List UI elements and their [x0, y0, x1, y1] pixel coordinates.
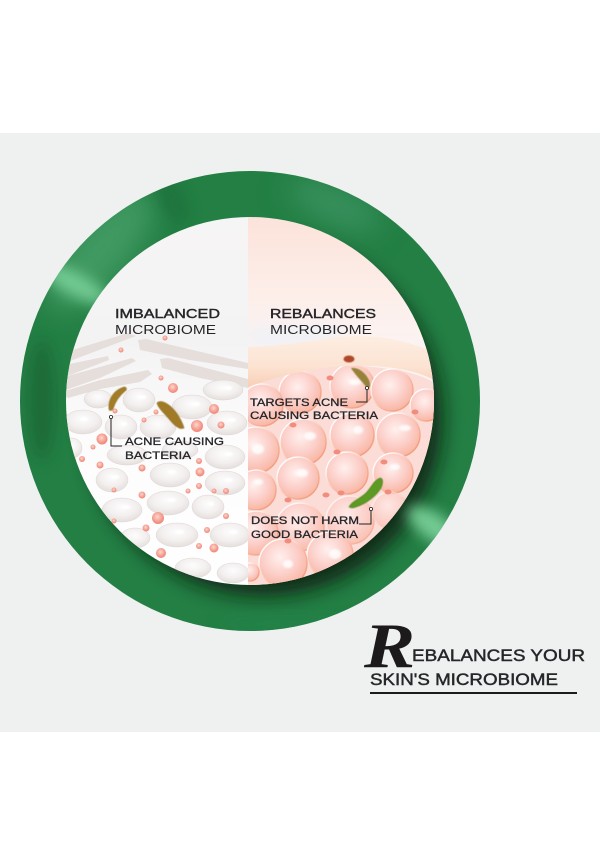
callout: does not harm good bacteria: GOOD BACTERIA: [251, 529, 359, 541]
icon: acne bacteria, left: [109, 387, 126, 410]
callout: acne causing bacteria: BACTERIA: [125, 450, 192, 462]
callout: targets acne causing bacteria: TARGETS ACNE: [250, 397, 348, 409]
heading: imbalanced microbiome: IMBALANCED: [115, 306, 220, 321]
icon: good bacteria: [349, 478, 383, 508]
icon: acne bacteria, right: [157, 402, 184, 429]
heading: imbalanced microbiome: [115, 306, 220, 337]
heading: rebalances microbiome: MICROBIOME: [270, 322, 372, 337]
ring shading: top dark: [154, 182, 184, 218]
callout: targets acne causing bacteria: [250, 386, 379, 422]
background band: [0, 133, 600, 732]
tagline: rebalances your skin's microbiome: SKIN'S MICROBIOME: [370, 670, 558, 689]
panel: imbalanced side: [60, 210, 250, 590]
icon: skin blemish: [344, 356, 354, 362]
callout: acne causing bacteria: ACNE CAUSING: [125, 436, 224, 448]
white cell glints: [117, 387, 236, 532]
microbiome disk: [60, 210, 442, 590]
green ring: [20, 170, 480, 631]
ring highlight: lower right: [398, 496, 450, 547]
heading: imbalanced microbiome: MICROBIOME: [115, 322, 216, 337]
callout: targets acne causing bacteria: CAUSING BACTERIA: [250, 410, 379, 422]
skin surface band: [248, 336, 438, 387]
ring highlight: upper left sheen: [42, 193, 159, 315]
ring shading: dark left edge: [28, 340, 56, 460]
skin fibres: [60, 333, 248, 398]
callout: acne causing bacteria: [109, 415, 224, 462]
ring shading: inner drop shadow: [86, 240, 442, 596]
pink cells: [248, 366, 434, 584]
cell glints: [252, 379, 411, 568]
red dots: [79, 336, 229, 558]
ring edge shade: bottom: [220, 617, 360, 631]
callout: does not harm good bacteria: [251, 507, 373, 541]
tagline: rebalances your skin's microbiome: R: [363, 611, 415, 681]
heading: rebalances microbiome: [270, 306, 376, 337]
icon: targeted bacteria: [351, 368, 370, 388]
red dots on tissue: [284, 376, 418, 544]
panel: rebalanced side: [248, 217, 434, 585]
infographic canvas: [0, 133, 600, 732]
tagline: rebalances your skin's microbiome: EBALANCES YOUR: [412, 646, 585, 665]
heading: rebalances microbiome: REBALANCES: [270, 306, 376, 321]
pink tissue base: [248, 366, 438, 590]
tagline: rebalances your skin's microbiome: [363, 611, 585, 694]
callout: does not harm good bacteria: DOES NOT HARM: [251, 515, 359, 527]
white cells: [62, 380, 250, 583]
